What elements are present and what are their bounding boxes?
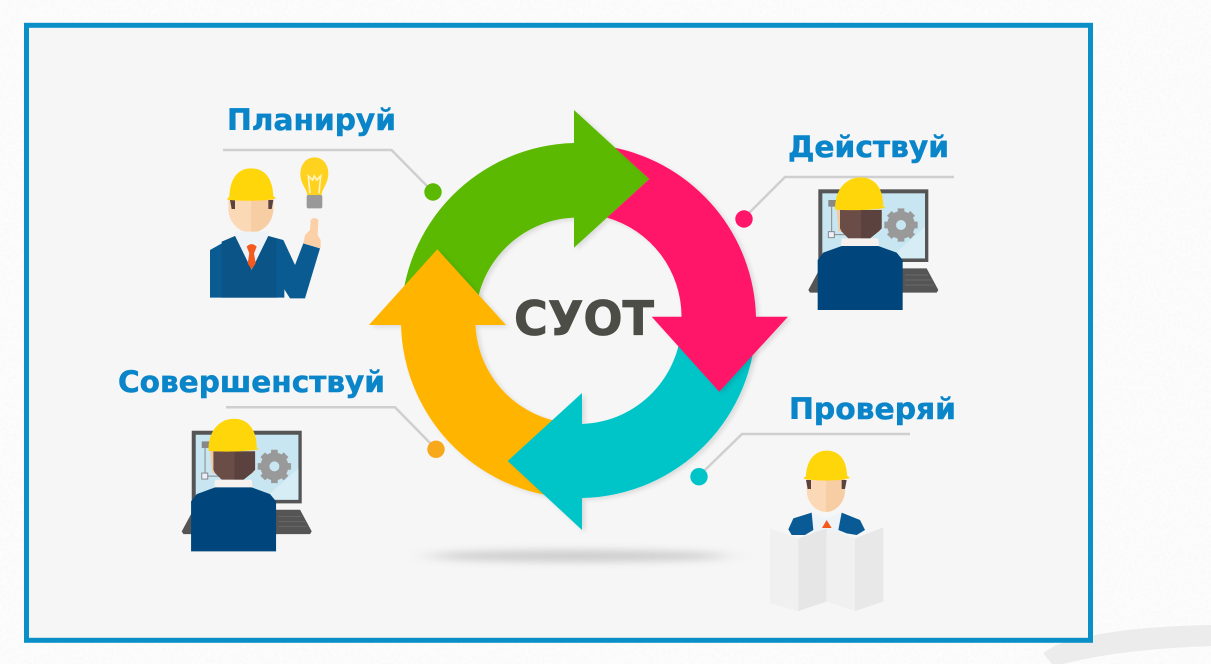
arrow: yellow	[369, 249, 578, 498]
icon: engineer at computer, act	[808, 177, 938, 310]
connector: plan	[223, 150, 442, 201]
arrow: green	[401, 110, 649, 320]
icon: engineer with lightbulb	[210, 157, 328, 298]
decorative swoosh	[1043, 625, 1211, 664]
icon: engineer with blueprint map	[770, 451, 883, 611]
heading: improve: Совершенствуй	[118, 365, 385, 399]
connector: act	[735, 177, 954, 228]
icon: engineer at computer, improve	[182, 419, 312, 551]
connector: improve	[226, 407, 445, 458]
center label: СУОТ	[514, 292, 654, 347]
heading: plan: Планируй	[227, 103, 396, 137]
arrow: pink	[607, 148, 788, 392]
ground shadow	[428, 550, 728, 562]
connector: check	[690, 434, 910, 485]
heading: act: Действуй	[788, 130, 949, 164]
chart: PDCA cycle of arrows	[369, 110, 788, 530]
arrow: teal	[508, 320, 756, 530]
heading: check: Проверяй	[789, 392, 956, 426]
